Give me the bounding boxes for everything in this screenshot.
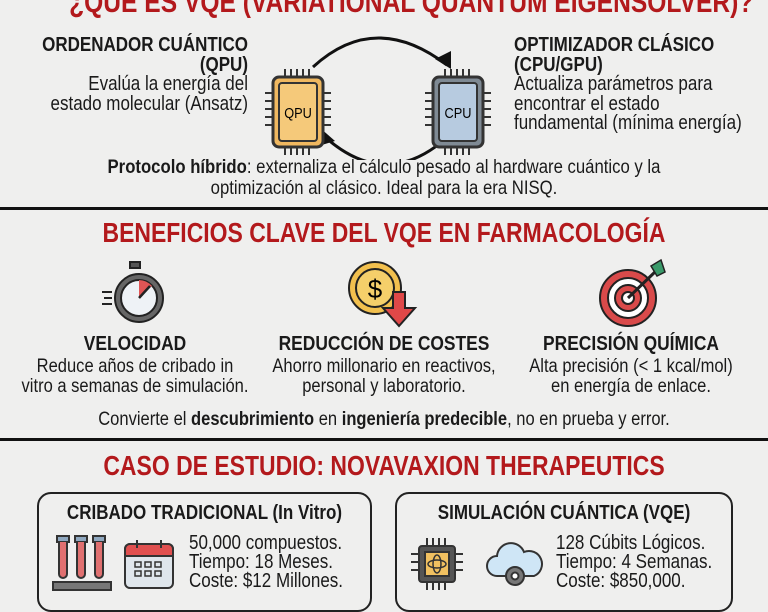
text: hybrid protocol [108, 157, 660, 199]
benefit: cost: Ahorro millonario en reactivos, [272, 356, 496, 377]
text: classical optimizer: Actualiza parámetros para [514, 73, 712, 95]
text: quantum computer: (QPU) [200, 54, 248, 76]
icon: cost coin [348, 261, 418, 328]
arrow: bottom [315, 127, 455, 164]
diagram: QPU/CPU loop [265, 36, 491, 160]
benefit: cost [272, 332, 496, 397]
icon: CPU chip: CPU [445, 104, 471, 121]
benefit: speed [22, 333, 248, 397]
stats: Tiempo: 4 Semanas. [556, 551, 712, 573]
text: quantum computer: estado molecular (Ansatz) [51, 92, 248, 114]
icon: stopwatch [102, 261, 164, 323]
benefit: cost: personal y laboratorio. [302, 376, 466, 397]
benefit: speed: vitro a semanas de simulación. [22, 376, 248, 397]
panel: quantum [395, 492, 733, 612]
text: hybrid protocol: optimización al clásico. Ideal para la era NISQ. [211, 178, 557, 199]
icon: CPU chip [425, 69, 491, 155]
stats: Tiempo: 18 Meses. [189, 551, 333, 573]
benefit: precision [529, 332, 733, 397]
icon: cloud gear [486, 542, 543, 586]
icon: quantum chip [411, 538, 463, 590]
benefit: precision: Alta precisión (< 1 kcal/mol) [529, 356, 733, 377]
benefit: speed: VELOCIDAD [84, 333, 186, 355]
stats: Coste: $850,000. [556, 570, 685, 592]
icon: test tubes [52, 535, 112, 591]
heading: case study: CASO DE ESTUDIO: NOVAVAXION THERAPEUTICS [103, 450, 665, 481]
stats [189, 532, 343, 592]
icon: cost coin: $ [368, 274, 383, 304]
stats: 128 Cúbits Lógicos. [556, 532, 705, 554]
icon: QPU chip [265, 69, 331, 155]
icon: calendar [124, 540, 174, 589]
panel: traditional [37, 492, 372, 612]
text: summary line: Convierte el descubrimiento en ingeniería predecible, no en prueba y error. [98, 409, 670, 430]
text: classical optimizer: fundamental (mínima energía) [514, 112, 742, 134]
stats: 50,000 compuestos. [189, 532, 342, 554]
icon: target [599, 258, 666, 327]
panel heading: CRIBADO TRADICIONAL (In Vitro) [67, 502, 342, 524]
text: quantum computer: Evalúa la energía del [88, 73, 248, 95]
benefit: cost: REDUCCIÓN DE COSTES [279, 333, 489, 355]
arrow: top [313, 38, 451, 69]
text: classical optimizer [514, 33, 742, 134]
heading: benefits: BENEFICIOS CLAVE DEL VQE EN FARMACOLOGÍA [102, 217, 665, 248]
stats: Coste: $12 Millones. [189, 570, 343, 592]
text: quantum computer [42, 33, 248, 114]
benefit: precision: PRECISIÓN QUÍMICA [543, 333, 719, 355]
text: quantum computer: ORDENADOR CUÁNTICO [42, 34, 248, 56]
stats [556, 532, 712, 592]
icon: QPU chip: QPU [284, 104, 312, 121]
panel heading: SIMULACIÓN CUÁNTICA (VQE) [438, 502, 690, 524]
text: classical optimizer: (CPU/GPU) [514, 54, 603, 76]
text: hybrid protocol: Protocolo híbrido: externaliza el cálculo pesado al hardware cuántico y la [108, 157, 660, 178]
benefit: precision: en energía de enlace. [551, 376, 711, 397]
text: classical optimizer: OPTIMIZADOR CLÁSICO [514, 34, 714, 56]
benefit: speed: Reduce años de cribado in [37, 356, 233, 377]
text: classical optimizer: encontrar el estado [514, 92, 660, 114]
